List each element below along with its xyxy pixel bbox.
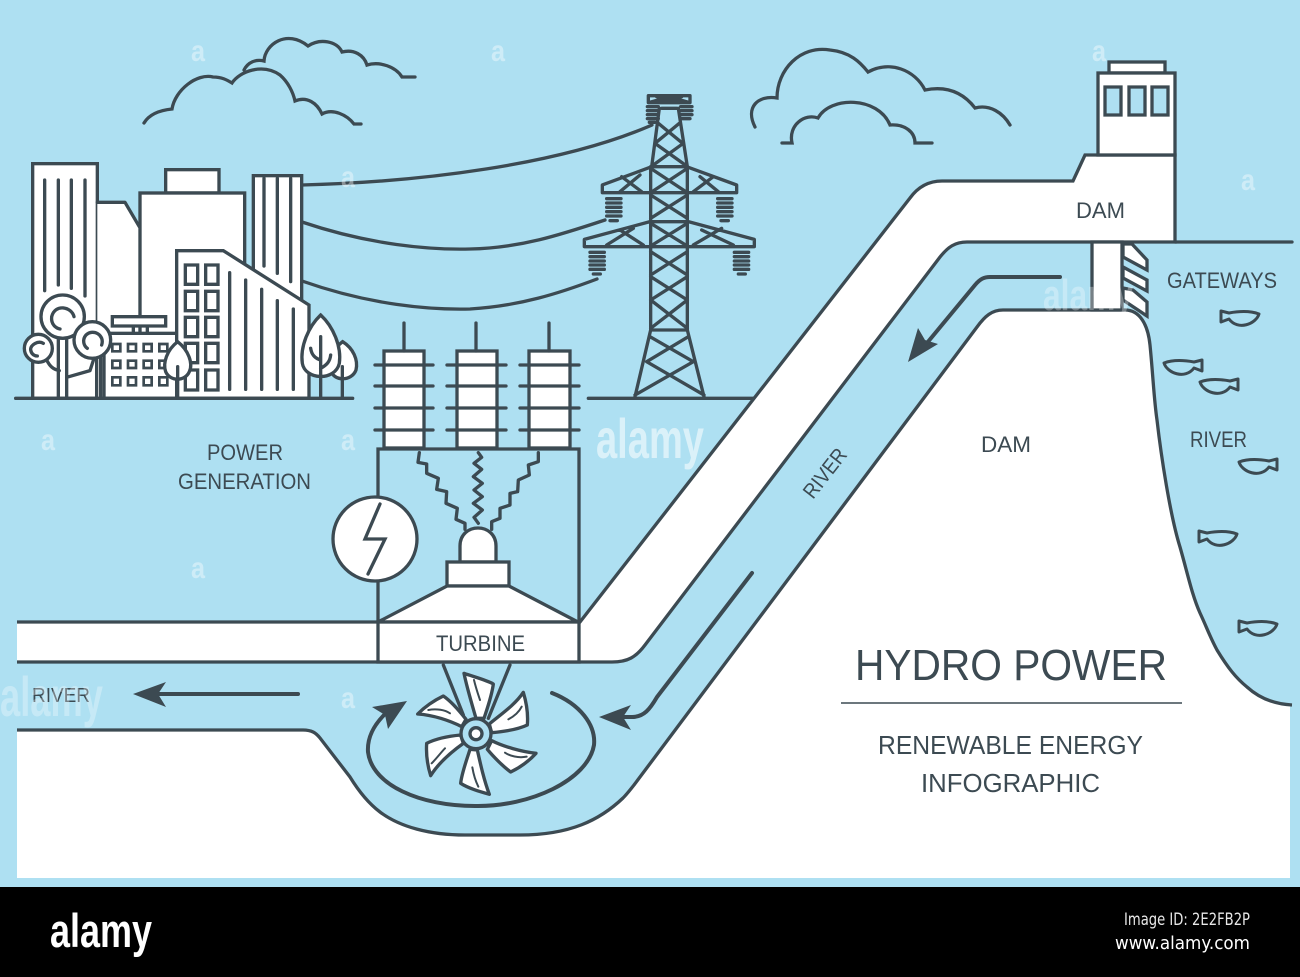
front block stripes — [230, 273, 293, 389]
penstock flow arrow — [908, 277, 1060, 362]
transmission tower — [584, 96, 754, 398]
label: dam crest: DAM — [1076, 198, 1125, 223]
building: low block — [104, 333, 177, 398]
building: right tower — [253, 176, 302, 398]
blade highlights — [428, 680, 527, 787]
watermarks: a — [1241, 164, 1255, 197]
runner shaft — [443, 665, 510, 718]
tower windows — [1105, 87, 1168, 115]
watermarks: a — [191, 552, 205, 585]
footer bar — [0, 887, 1300, 977]
tower ground line — [588, 393, 753, 403]
subtitle line two: INFOGRAPHIC — [921, 768, 1100, 798]
watermarks: a — [191, 35, 205, 68]
label: gateways: GATEWAYS — [1167, 268, 1277, 293]
watermarks: a — [41, 424, 55, 457]
city ground line — [16, 393, 353, 403]
runner hub — [461, 719, 491, 749]
turbine runner — [418, 665, 536, 794]
dam control tower — [1098, 62, 1175, 155]
building: central block — [140, 193, 245, 398]
front block windows — [185, 265, 218, 390]
trees: round left group — [24, 295, 111, 398]
turbine box — [378, 622, 579, 662]
gateway column and fins — [1092, 242, 1147, 316]
hub centre — [470, 728, 482, 740]
watermarks: a — [1092, 35, 1106, 68]
label: diagonal river: RIVER — [799, 444, 852, 503]
tower body — [1098, 73, 1175, 155]
upper dam crest band — [17, 155, 1175, 662]
outflow arrow — [133, 682, 298, 707]
power lines — [302, 125, 652, 309]
fish — [1164, 311, 1277, 635]
label: power generation: POWER — [207, 440, 283, 465]
label: power generation: GENERATION — [178, 469, 311, 494]
building: tall left tower — [33, 164, 97, 398]
watermarks: alamy — [596, 407, 704, 470]
mast lattice — [651, 167, 687, 330]
watermarks: a — [341, 682, 355, 715]
building: angled middle block — [97, 202, 139, 398]
insulator stack left — [375, 323, 433, 448]
tower top frame and insulators — [647, 96, 692, 122]
watermarks: a — [341, 161, 355, 194]
upper cross arm — [602, 167, 737, 193]
label: turbine: TURBINE — [436, 631, 525, 656]
water channel and lower dam body — [17, 310, 1292, 878]
title rule — [841, 702, 1182, 704]
lower cross arm — [584, 222, 754, 247]
incoming flow arrow — [599, 573, 752, 730]
water surface line — [1175, 240, 1292, 244]
main title: HYDRO POWER — [855, 641, 1167, 690]
low block roof — [112, 317, 166, 333]
building: rooftop box — [166, 170, 219, 193]
coil wires — [418, 453, 538, 529]
runner blades — [464, 673, 493, 718]
insulator stack right — [520, 323, 579, 448]
watermarks: a — [341, 424, 355, 457]
footer image id: Image ID: 2E2FB2P — [1124, 910, 1250, 930]
label: right river: RIVER — [1190, 427, 1247, 452]
watermarks: a — [491, 35, 505, 68]
footer logo: alamy — [50, 904, 152, 957]
tower legs — [635, 330, 704, 397]
subtitle line one: RENEWABLE ENERGY — [878, 730, 1143, 760]
insulator stack centre — [447, 323, 506, 448]
footer url: www.alamy.com — [1115, 933, 1250, 954]
generator dome — [460, 528, 496, 562]
generator symbol — [333, 497, 417, 581]
tower upper body — [652, 108, 687, 167]
window stripes on towers — [45, 178, 291, 296]
tower roof — [1109, 62, 1165, 73]
trees: right pair — [302, 315, 357, 398]
low block windows — [112, 344, 167, 385]
title block — [841, 641, 1182, 798]
watermarks: alamy — [0, 665, 103, 728]
watermarks — [0, 35, 1255, 728]
label: dam body: DAM — [981, 432, 1031, 457]
tree: teardrop centre — [165, 342, 191, 398]
label: outlet river: RIVER — [32, 685, 90, 707]
generator base — [447, 562, 509, 586]
turbine swirl arrow — [368, 693, 594, 806]
outline of angled block — [97, 202, 139, 227]
cloud group: left — [144, 39, 415, 124]
hanging insulators — [590, 199, 749, 274]
generator housing — [333, 323, 579, 662]
city buildings and trees — [16, 164, 357, 398]
cloud group: right — [752, 49, 1010, 143]
building: front slanted block — [177, 251, 309, 398]
label: power generation — [178, 440, 311, 494]
turbine hood — [378, 586, 578, 622]
watermarks: alamy — [1043, 271, 1133, 320]
